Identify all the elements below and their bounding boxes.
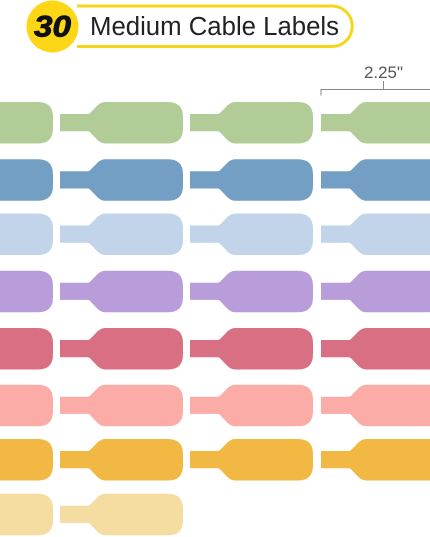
row: orange labels <box>0 439 430 480</box>
badge number: 30 <box>34 10 71 44</box>
badge: yellow circle <box>26 0 78 52</box>
bracket line <box>321 81 430 96</box>
row: light blue labels <box>0 214 430 255</box>
heading text: Medium Cable Labels <box>90 13 339 41</box>
dimension value: 2.25" <box>364 63 403 82</box>
row: purple labels <box>0 271 430 312</box>
row: cream labels <box>0 494 183 535</box>
row: red labels <box>0 328 430 370</box>
row: pink labels <box>0 385 430 426</box>
dimension bracket <box>321 63 430 96</box>
heading pill outline <box>77 6 352 46</box>
row: green labels <box>0 102 430 144</box>
row: blue labels <box>0 159 430 201</box>
heading: 30 Medium Cable Labels <box>26 0 352 52</box>
